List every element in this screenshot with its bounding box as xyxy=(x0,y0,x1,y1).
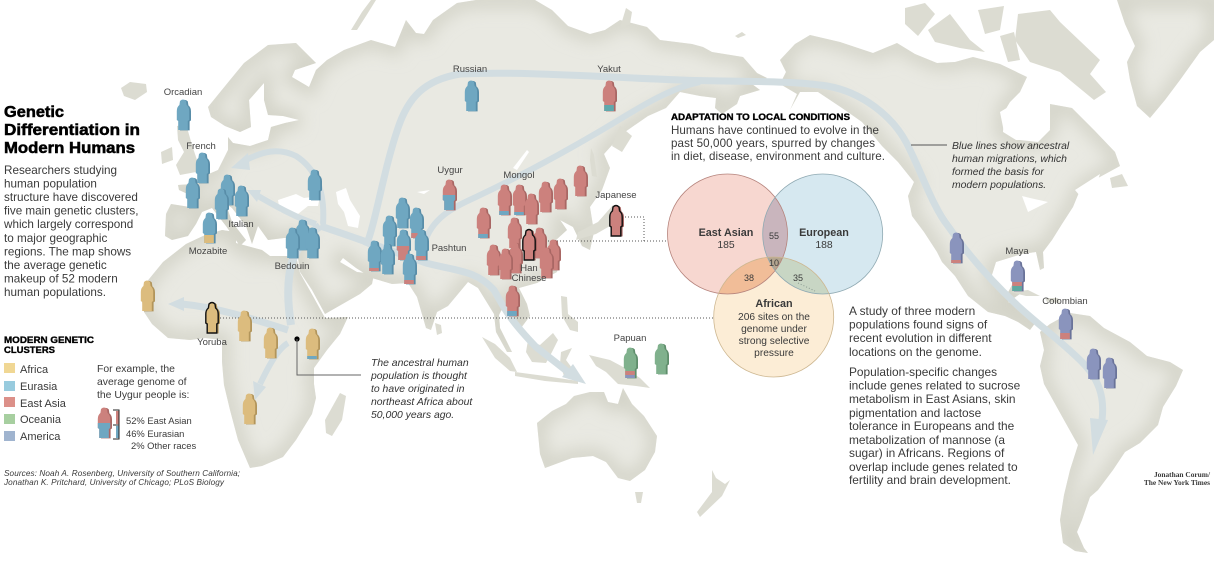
population labels: Orcadian xyxy=(164,87,202,98)
population figures: Eurasia xyxy=(177,80,479,284)
islands xyxy=(121,0,1128,517)
heading: adaptation to local conditions: in diet, disease, environment and culture. xyxy=(671,150,885,163)
callout: ancestral origin in northeast Africa: northeast Africa about xyxy=(371,397,473,408)
sources: Sources: Noah A. Rosenberg, University of Southern California; xyxy=(4,469,240,478)
population figures: Africa xyxy=(141,280,320,424)
population labels: Chinese xyxy=(512,273,546,284)
population labels xyxy=(164,64,1088,348)
population labels: Colombian xyxy=(1042,296,1088,307)
heading: adaptation to local conditions xyxy=(671,112,885,163)
text block: study findings: pigmentation and lactose xyxy=(849,406,982,420)
callout: blue lines: human migrations, which xyxy=(952,154,1067,165)
population labels: Papuan xyxy=(614,333,646,344)
heading: adaptation to local conditions: Humans have continued to evolve in the xyxy=(671,124,879,137)
legend example: Uygur genome xyxy=(97,364,196,451)
text block: study findings: sugar) in Africans. Regions of xyxy=(849,446,1005,460)
credit xyxy=(1144,470,1211,487)
text block: study findings: metabolism in East Asians, skin xyxy=(849,392,1016,406)
inland seas xyxy=(278,100,1100,228)
legend: modern genetic clusters: MODERN GENETIC xyxy=(4,335,95,345)
title: Modern Humans xyxy=(4,140,135,157)
legend example: Uygur genome: average genome of xyxy=(97,377,187,388)
population labels: Mozabite xyxy=(189,246,227,257)
legend: modern genetic clusters: CLUSTERS xyxy=(4,345,55,355)
intro text: five main genetic clusters, xyxy=(4,205,138,218)
text block: study findings: include genes related to sucrose xyxy=(849,378,1021,392)
legend: modern genetic clusters: Eurasia xyxy=(20,381,58,393)
blue migration routes xyxy=(168,73,1108,455)
title xyxy=(4,104,140,157)
legend example: Uygur genome: 52% East Asian xyxy=(126,415,192,426)
intro text: to major geographic xyxy=(4,232,107,245)
route: South Asia to Oceania xyxy=(320,226,568,372)
callout: ancestral origin in northeast Africa xyxy=(294,336,473,421)
title: Genetic xyxy=(4,104,64,121)
credit: The New York Times xyxy=(1144,478,1210,487)
text block: study findings: fertility and brain development. xyxy=(849,473,1011,487)
legend example: Uygur genome: the Uygur people is: xyxy=(97,390,189,401)
text block: study findings: Population-specific changes xyxy=(849,365,997,379)
population figures: East Asia xyxy=(442,80,624,316)
route: Beringia and the Americas xyxy=(366,73,1103,420)
population figures: Oceania xyxy=(623,344,669,378)
venn diagram: 206 sites on the xyxy=(738,312,810,323)
legend: modern genetic clusters: Oceania xyxy=(20,414,62,426)
callout: blue lines: Blue lines show ancestral xyxy=(952,141,1070,152)
text block: study findings: A study of three modern xyxy=(849,304,975,318)
population labels: Bedouin xyxy=(275,261,309,272)
population labels: Japanese xyxy=(595,190,637,201)
intro text: structure have discovered xyxy=(4,191,138,204)
callout: blue lines: formed the basis for xyxy=(952,167,1044,178)
venn diagram: East Asian xyxy=(699,227,753,239)
highlighted figure: Yoruba xyxy=(206,302,220,333)
legend: modern genetic clusters: Africa xyxy=(20,364,49,376)
intro text: regions. The map shows xyxy=(4,245,131,258)
population labels: Mongol xyxy=(503,170,535,181)
Canadian Arctic islands xyxy=(905,3,935,36)
legend example: Uygur genome: 2% Other races xyxy=(131,440,196,451)
dotted leader lines xyxy=(220,217,714,318)
title: Differentiation in xyxy=(4,122,140,139)
legend: modern genetic clusters: America xyxy=(20,431,61,443)
venn diagram: 55 xyxy=(769,231,779,241)
venn diagram: African xyxy=(755,298,793,310)
highlighted figure: Han Chinese xyxy=(523,230,537,260)
population figures: America xyxy=(949,232,1117,388)
venn diagram: European xyxy=(799,227,849,239)
venn diagram: 38 xyxy=(744,273,754,283)
intro text: which largely correspond xyxy=(3,218,133,231)
venn diagram xyxy=(668,174,883,377)
venn diagram: 35 xyxy=(793,273,803,283)
route: Europe arc xyxy=(246,151,323,224)
intro text: the average genetic xyxy=(4,259,107,272)
text block: study findings: recent evolution in different xyxy=(849,331,992,345)
legend: modern genetic clusters: East Asia xyxy=(20,398,67,410)
text block: study findings: metabolization of mannose (a xyxy=(849,433,1005,447)
population labels: French xyxy=(186,141,216,152)
text block: study findings xyxy=(849,304,1021,487)
venn diagram: 185 xyxy=(717,240,735,251)
route: South Africa xyxy=(260,343,288,384)
text block: study findings: overlap include genes related to xyxy=(849,460,1018,474)
text block: study findings: populations found signs of xyxy=(849,318,988,332)
sources: Jonathan K. Pritchard, University of Chicago; PLoS Biology xyxy=(3,478,225,487)
population labels: Yakut xyxy=(597,64,621,75)
legend: modern genetic clusters xyxy=(4,335,95,443)
population labels: Yoruba xyxy=(197,337,228,348)
venn diagram: 10 xyxy=(769,258,779,268)
callout: ancestral origin in northeast Africa: The ancestral human xyxy=(371,358,469,369)
route: West Africa xyxy=(182,304,288,330)
callout: ancestral origin in northeast Africa: population is thought xyxy=(370,371,468,382)
population labels: Uygur xyxy=(437,165,463,176)
route: East Asia xyxy=(424,82,700,244)
sources xyxy=(3,469,240,487)
callout: blue lines xyxy=(911,141,1070,191)
population labels: Italian xyxy=(228,219,254,230)
heading: adaptation to local conditions: past 50,000 years, spurred by changes xyxy=(671,137,875,150)
population labels: Russian xyxy=(453,64,487,75)
text block: study findings: tolerance in Europeans and the xyxy=(849,419,1015,433)
credit: Jonathan Corum/ xyxy=(1154,470,1211,479)
callout: ancestral origin in northeast Africa: 50,000 years ago. xyxy=(371,410,454,421)
callout: blue lines: modern populations. xyxy=(952,180,1046,191)
text block: study findings: locations on the genome. xyxy=(849,345,982,359)
intro text: Researchers studying xyxy=(4,164,117,177)
venn diagram: genome under xyxy=(741,324,807,335)
intro text xyxy=(3,164,138,299)
venn diagram: pressure xyxy=(754,348,794,359)
intro text: human population xyxy=(4,178,97,190)
route: out of Africa xyxy=(288,226,320,325)
population labels: Maya xyxy=(1005,246,1029,257)
legend example: Uygur genome: For example, the xyxy=(97,364,175,375)
population labels: Han xyxy=(520,263,538,274)
legend example: Uygur genome: 46% Eurasian xyxy=(126,428,184,439)
heading: adaptation to local conditions: ADAPTATION TO LOCAL CONDITIONS xyxy=(671,112,850,122)
intro text: human populations. xyxy=(4,286,106,299)
population labels: Pashtun xyxy=(432,243,466,254)
venn diagram: 188 xyxy=(815,240,833,251)
route: Mediterranean branch xyxy=(258,196,316,224)
intro text: makeup of 52 modern xyxy=(4,272,118,285)
callout: ancestral origin in northeast Africa: to have originated in xyxy=(371,384,465,395)
venn diagram: strong selective xyxy=(739,336,810,347)
highlighted figure: Japanese xyxy=(610,206,624,236)
